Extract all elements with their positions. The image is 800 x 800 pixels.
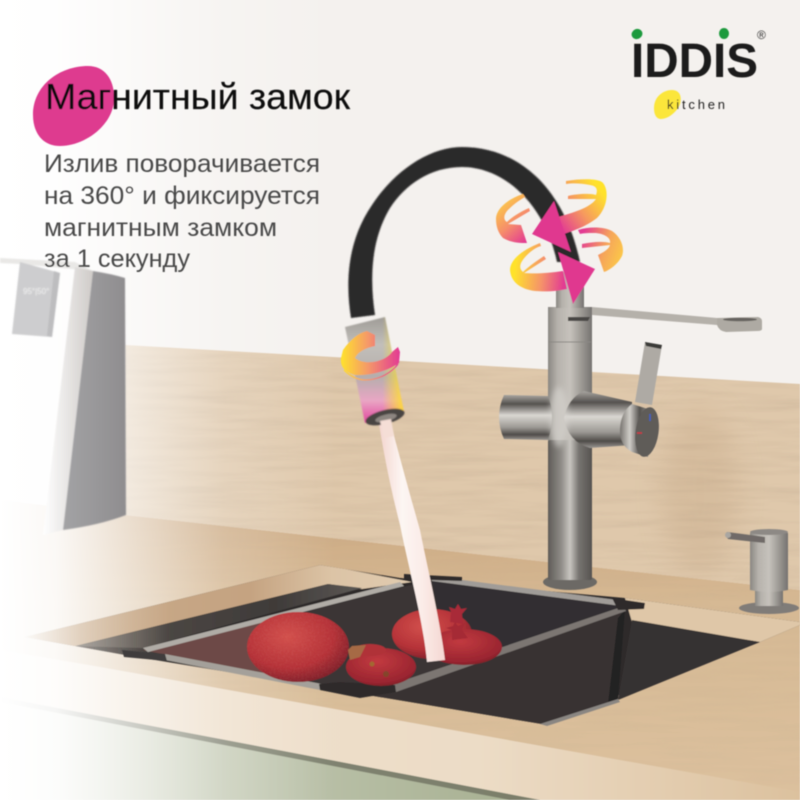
kitchen wordmark: kitchen [667,97,725,112]
large arrow pointing left [532,179,607,252]
kitchen backdrop [0,345,800,800]
rotation arrow around nozzle [341,331,400,380]
description text [44,150,320,273]
faucet body [499,272,762,590]
small right arrow [578,227,623,272]
mixer handle cap [620,404,662,458]
neck under hose [556,272,584,308]
description text: за 1 секунду [44,245,190,273]
left cross arm [499,395,552,440]
registered mark: ® [757,28,766,42]
tower light side [43,267,93,535]
water stream [379,424,445,662]
title: Магнитный замок [45,76,350,117]
countertop [54,515,800,800]
description text: на 360° и фиксируется [44,182,320,210]
large pomegranate [247,612,349,682]
faucet column lower [548,440,592,580]
background appliance tower [0,258,126,535]
soap dispenser [725,529,799,614]
description text: Излив поворачивается [44,150,320,178]
wall display panel [12,262,60,337]
wall display panel: 95°|50° [23,287,49,296]
faucet base [543,574,597,590]
arrows rotating around spout [496,179,623,304]
cross junction highlight [550,387,568,447]
tower grey side [63,271,126,530]
right pomegranate [426,629,502,665]
tower shelf [0,258,93,271]
logo green dots [630,27,729,41]
small left arrow [496,194,530,243]
description text: магнитным замком [44,214,277,242]
black flexible hose [348,147,580,318]
upper spout arm [568,307,762,332]
right cross arm [564,391,632,448]
faucet column upper [548,307,592,497]
sink basin [25,565,800,726]
wooden backsplash [125,345,800,590]
colander [122,574,645,698]
pink blob behind title [33,66,114,146]
front small pomegranate [346,648,416,686]
large arrow pointing right [510,243,595,304]
back pomegranate [392,609,472,659]
mixer lever [635,342,662,405]
logo wordmark: IDDIS [631,35,758,88]
magnetic nozzle [345,317,406,438]
IDDIS kitchen logo [630,27,766,119]
pomegranates [247,604,502,686]
yellow blob [654,90,681,119]
green cabinet front [0,697,540,800]
